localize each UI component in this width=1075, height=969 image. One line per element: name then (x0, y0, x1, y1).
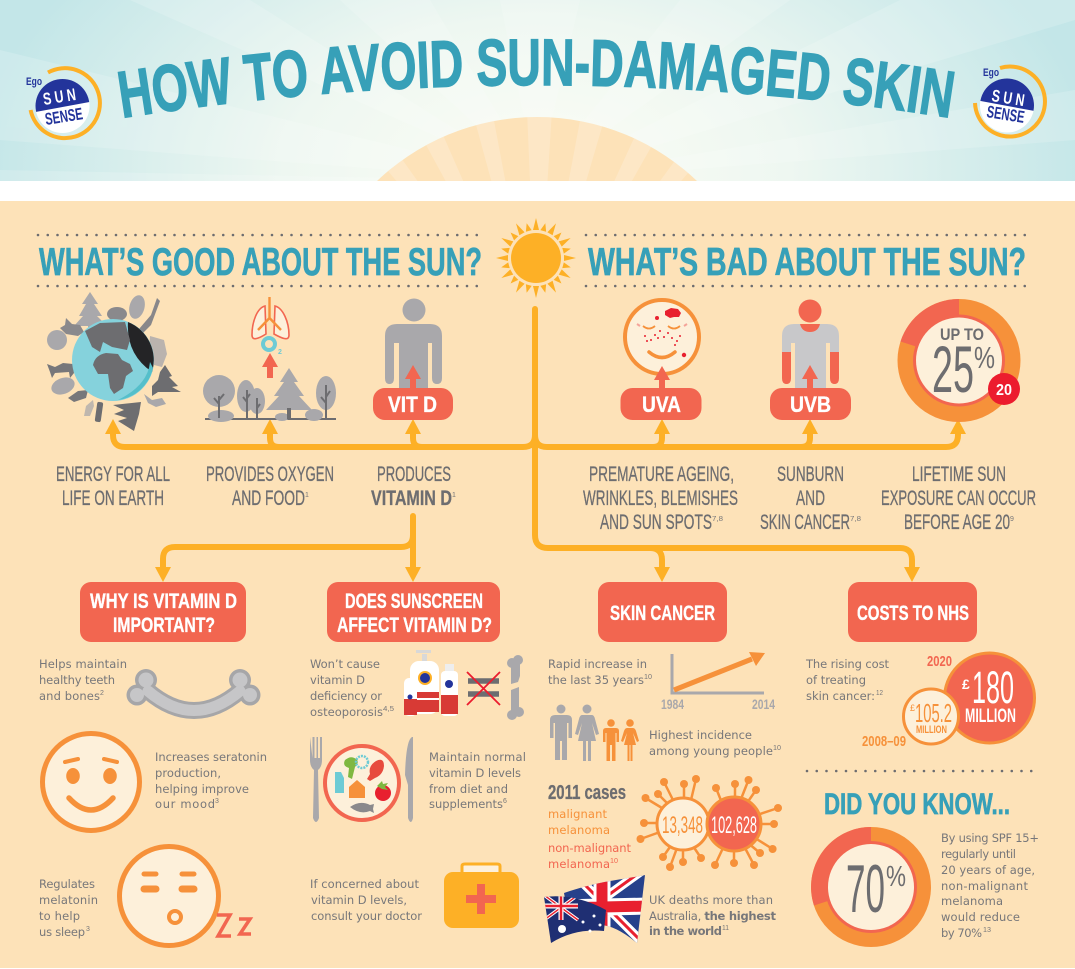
box: does sunscreen affect vitamin d (327, 582, 500, 642)
label: vitamin d (371, 462, 456, 510)
text: deficiency: Won’t cause (310, 657, 380, 671)
text: spf: non-malignant (941, 879, 1028, 893)
text: young people (649, 728, 781, 758)
text: 2011 cases: 10 (610, 858, 618, 865)
text: mood: production, (155, 766, 221, 780)
label: oxygen: 1 (305, 492, 309, 499)
text: deficiency: osteoporosis (310, 705, 383, 719)
text: rising cost: of treating (806, 673, 866, 687)
chart: cell counts (636, 775, 782, 871)
text: 2011 cases: 2011 cases (548, 782, 626, 804)
icon: flags (544, 875, 645, 943)
box: why is vitamin d important: WHY IS VITAMIN D (90, 590, 237, 613)
text: sleep: 3 (86, 926, 90, 933)
text: teeth and bones (39, 657, 127, 703)
label: lifetime exposure: LIFETIME SUN (912, 462, 1006, 486)
chart: cost bubbles (862, 653, 1034, 750)
header background (0, 0, 1075, 181)
icon: bone (126, 669, 260, 710)
text: diet: Maintain normal (429, 750, 526, 764)
chart: rising incidence: 2014 (752, 696, 775, 712)
text: diet: 6 (503, 798, 507, 805)
text: spf: regularly until (941, 847, 1016, 861)
text: young people: among young people (649, 744, 773, 758)
label: vitamin d: 1 (452, 492, 456, 499)
icon: family (550, 704, 639, 761)
text: 2011 cases: malignant (548, 807, 607, 821)
text: rising cost: skin cancer: (806, 689, 875, 703)
icon: sun (496, 218, 576, 298)
text: sleep: Regulates (39, 877, 95, 891)
text: 2011 cases: non-malignant (548, 841, 631, 855)
chart: cost bubbles: 2008–09 (862, 733, 906, 750)
badge: uvb (770, 388, 851, 420)
icon: sunburnt person (782, 300, 839, 388)
text: sleep: us sleep (39, 925, 85, 939)
chart: cost bubbles: MILLION (916, 724, 947, 736)
icon: globe with life (47, 292, 181, 431)
box: skin cancer: SKIN CANCER (610, 602, 715, 625)
text: consult doctor: If concerned about (310, 877, 419, 891)
label: oxygen: PROVIDES OXYGEN (206, 462, 334, 486)
logo right: Ego (983, 67, 999, 79)
logo right: SENSE (985, 102, 1026, 127)
text: uk deaths: UK deaths more than (649, 893, 773, 907)
chart: cost bubbles: MILLION (965, 706, 1016, 727)
logo left: S U N (42, 85, 77, 109)
text: uk deaths: in the world (649, 924, 722, 938)
chart: rising incidence (661, 652, 775, 712)
logo left: Ego (26, 76, 42, 88)
text: teeth and bones: healthy teeth (39, 673, 115, 687)
label: premature ageing (583, 462, 738, 534)
text: 2011 cases: melanoma (548, 857, 610, 871)
text: rapid increase: Rapid increase in (548, 657, 647, 671)
text: mood (155, 750, 267, 811)
icon: face with blemishes (625, 300, 699, 388)
title: HOW TO AVOID SUN-DAMAGED SKIN (118, 38, 955, 118)
text: uk deaths: 11 (722, 925, 729, 932)
badge: uva (620, 388, 702, 420)
logo left (26, 68, 100, 138)
label: energy (56, 462, 170, 510)
box: does sunscreen affect vitamin d: AFFECT VITAMIN D? (337, 614, 492, 637)
text: spf (941, 831, 1039, 940)
chart: cost bubbles: 180 (972, 662, 1014, 713)
text: consult doctor (310, 877, 422, 923)
badge: vit d (373, 388, 453, 420)
box: why is vitamin d important: IMPORTANT? (113, 614, 215, 637)
icon: lungs and oxygen: 2 (278, 349, 282, 356)
icon: medical kit (444, 864, 519, 928)
text: rising cost (805, 657, 889, 703)
heading: good: WHAT’S GOOD ABOUT THE SUN? (39, 241, 482, 284)
label: premature ageing: AND SUN SPOTS (600, 510, 712, 534)
icon: person vitamin D (385, 298, 442, 388)
chart: cost bubbles: £ (910, 703, 915, 713)
donut: up to 25 percent (898, 299, 1020, 422)
label: lifetime exposure (881, 462, 1036, 534)
text: sleep (39, 877, 98, 939)
label: oxygen (206, 462, 334, 510)
donut: up to 25 percent: 20 (996, 382, 1012, 399)
text: mood: 3 (215, 798, 219, 805)
label: sunburn (760, 462, 861, 534)
icon: plate with food (310, 737, 413, 822)
icon: sunscreen bottles (404, 650, 458, 716)
badge: uva: UVA (642, 392, 681, 417)
text: diet: supplements (429, 797, 503, 811)
text: deficiency (310, 657, 394, 719)
donut: up to 25 percent: 25 (932, 332, 974, 406)
donut: 70 percent: 70 (846, 851, 885, 927)
text: teeth and bones: and bones (39, 689, 100, 703)
label: lifetime exposure: BEFORE AGE 20 (904, 510, 1010, 534)
label: vitamin d: VITAMIN D (371, 486, 452, 510)
box: costs to nhs (848, 582, 977, 642)
text: mood: helping improve (155, 782, 249, 796)
label: sunburn: 7,8 (850, 516, 861, 523)
label: premature ageing: 7,8 (712, 516, 723, 523)
text: deficiency: vitamin D (310, 673, 365, 687)
donut: up to 25 percent: % (974, 340, 995, 375)
logo right: S U N (990, 86, 1026, 110)
main panel background (0, 201, 1075, 968)
text: spf: 13 (983, 927, 991, 934)
donut: 70 percent: % (886, 861, 906, 893)
text: teeth and bones: 2 (100, 690, 104, 697)
logo left: SENSE (44, 104, 84, 129)
text: uk deaths (649, 893, 776, 938)
text: 2011 cases (548, 782, 631, 871)
chart: rising incidence: 1984 (661, 696, 684, 712)
text: uk deaths: Australia, the highest (649, 909, 776, 923)
chart: cell counts: 102,628 (711, 812, 757, 839)
heading: did you know: DID YOU KNOW... (824, 788, 1010, 821)
text: diet (429, 750, 526, 811)
logo right (975, 67, 1045, 137)
box: why is vitamin d important (80, 582, 246, 642)
text: rising cost: 12 (876, 690, 883, 697)
text: rapid increase: the last 35 years (548, 673, 644, 687)
icon: smiling face (42, 734, 140, 830)
box: skin cancer (598, 582, 727, 642)
box: costs to nhs: COSTS TO NHS (857, 602, 969, 625)
text: rapid increase (548, 657, 652, 687)
label: oxygen: AND FOOD (232, 486, 305, 510)
chart: cost bubbles: £ (962, 676, 970, 692)
text: mood: our mood (155, 797, 215, 811)
text: spf: melanoma (941, 894, 1003, 908)
text: deficiency: 4,5 (383, 706, 394, 713)
text: mood: Increases seratonin (155, 750, 267, 764)
text: diet: vitamin D levels (429, 766, 521, 780)
text: spf: By using SPF 15+ (941, 831, 1039, 845)
label: energy: ENERGY FOR ALL (56, 462, 170, 486)
text: consult doctor: vitamin D levels, (311, 893, 407, 907)
text: rapid increase: 10 (644, 674, 652, 681)
label: premature ageing: WRINKLES, BLEMISHES (583, 486, 738, 510)
text: spf: by 70% (941, 926, 982, 940)
donut: up to 25 percent: UP TO (940, 325, 984, 344)
label: vitamin d: PRODUCES (377, 462, 451, 486)
label: sunburn: AND (796, 486, 825, 510)
text: consult doctor: consult your doctor (311, 909, 422, 923)
rising sun (377, 117, 697, 181)
icon: trees (203, 368, 336, 422)
badge: uvb: UVB (790, 392, 831, 417)
chart: cost bubbles: 105.2 (915, 698, 952, 728)
text: teeth and bones: Helps maintain (39, 657, 127, 671)
text: sleep: melatonin (39, 893, 98, 907)
chart: cell counts: 13,348 (662, 812, 703, 839)
text: rising cost: The rising cost (805, 657, 889, 671)
label: sunburn: SKIN CANCER (760, 510, 850, 534)
icon: no bone loss (467, 655, 524, 720)
box: does sunscreen affect vitamin d: DOES SUNSCREEN (345, 590, 483, 613)
text: 2011 cases: melanoma (548, 823, 610, 837)
chart: cost bubbles: 2020 (927, 653, 952, 670)
label: premature ageing: PREMATURE AGEING, (589, 462, 734, 486)
label: energy: LIFE ON EARTH (62, 486, 164, 510)
text: young people: 10 (773, 745, 781, 752)
donut: 70 percent (811, 827, 931, 947)
text: young people: Highest incidence (649, 728, 752, 742)
flow arrows (113, 309, 958, 570)
label: lifetime exposure: 9 (1010, 516, 1014, 523)
text: sleep: to help (39, 909, 80, 923)
text: spf: would reduce (941, 910, 1020, 924)
label: sunburn: SUNBURN (777, 462, 844, 486)
text: deficiency: deficiency or (310, 689, 382, 703)
badge: vit d: VIT D (388, 392, 437, 417)
text: spf: 20 years of age, (941, 863, 1035, 877)
text: diet: from diet and (429, 782, 508, 796)
icon: sleeping face (120, 846, 251, 946)
icon: lungs and oxygen (252, 297, 289, 378)
